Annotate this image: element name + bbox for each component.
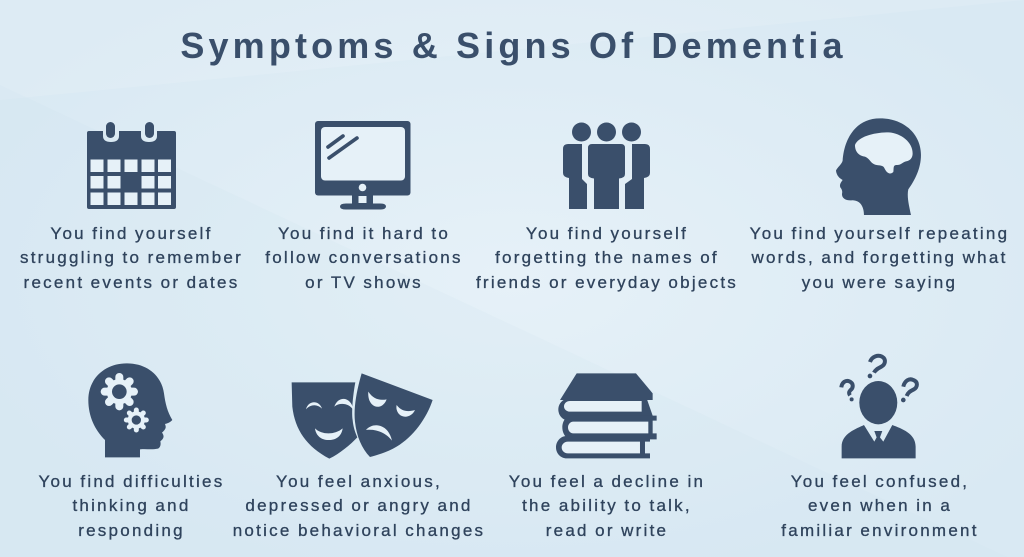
text: monitor caption: follow conversations [265, 248, 463, 267]
icon: theatre masks [292, 373, 433, 459]
text: monitor caption [265, 224, 463, 292]
text: calendar caption: You find yourself [50, 224, 213, 243]
text: confused caption: even when in a [808, 496, 952, 515]
text: books caption [508, 472, 705, 540]
text: gears caption: responding [78, 521, 185, 540]
text: books caption: the ability to talk, [522, 496, 692, 515]
text: calendar caption: recent events or dates [24, 273, 239, 292]
icon: head with brain [836, 118, 921, 215]
text: gears caption [38, 472, 224, 540]
text: masks caption: You feel anxious, [276, 472, 442, 491]
text: confused caption: You feel confused, [791, 472, 969, 491]
text: monitor caption: You find it hard to [278, 224, 450, 243]
text: gears caption: You find difficulties [39, 472, 224, 491]
icon: stack of books [556, 373, 657, 458]
icon: computer monitor [315, 121, 410, 210]
icon: group of people [563, 122, 650, 209]
title: Symptoms & Signs Of Dementia [180, 25, 847, 66]
icon: head with gears [88, 363, 172, 457]
text: masks caption: depressed or angry and [245, 496, 473, 515]
text: masks caption [233, 472, 485, 540]
text: calendar caption: struggling to remember [20, 248, 243, 267]
text: confused caption [781, 472, 979, 540]
text: brain caption: you were saying [802, 273, 957, 292]
text: people caption: You find yourself [526, 224, 688, 243]
text: people caption [476, 224, 738, 292]
text: books caption: You feel a decline in [509, 472, 705, 491]
text: people caption: forgetting the names of [495, 248, 719, 267]
text: masks caption: notice behavioral changes [233, 521, 485, 540]
text: books caption: read or write [546, 521, 668, 540]
text: brain caption [750, 224, 1009, 292]
icon: calendar [87, 122, 176, 209]
text: people caption: friends or everyday objects [476, 273, 738, 292]
text: calendar caption [20, 224, 243, 292]
text: brain caption: You find yourself repeating [750, 224, 1009, 243]
text: confused caption: familiar environment [781, 521, 979, 540]
icon: confused person [841, 356, 917, 458]
text: monitor caption: or TV shows [305, 273, 423, 292]
text: gears caption: thinking and [72, 496, 191, 515]
text: brain caption: words, and forgetting what [751, 248, 1008, 267]
